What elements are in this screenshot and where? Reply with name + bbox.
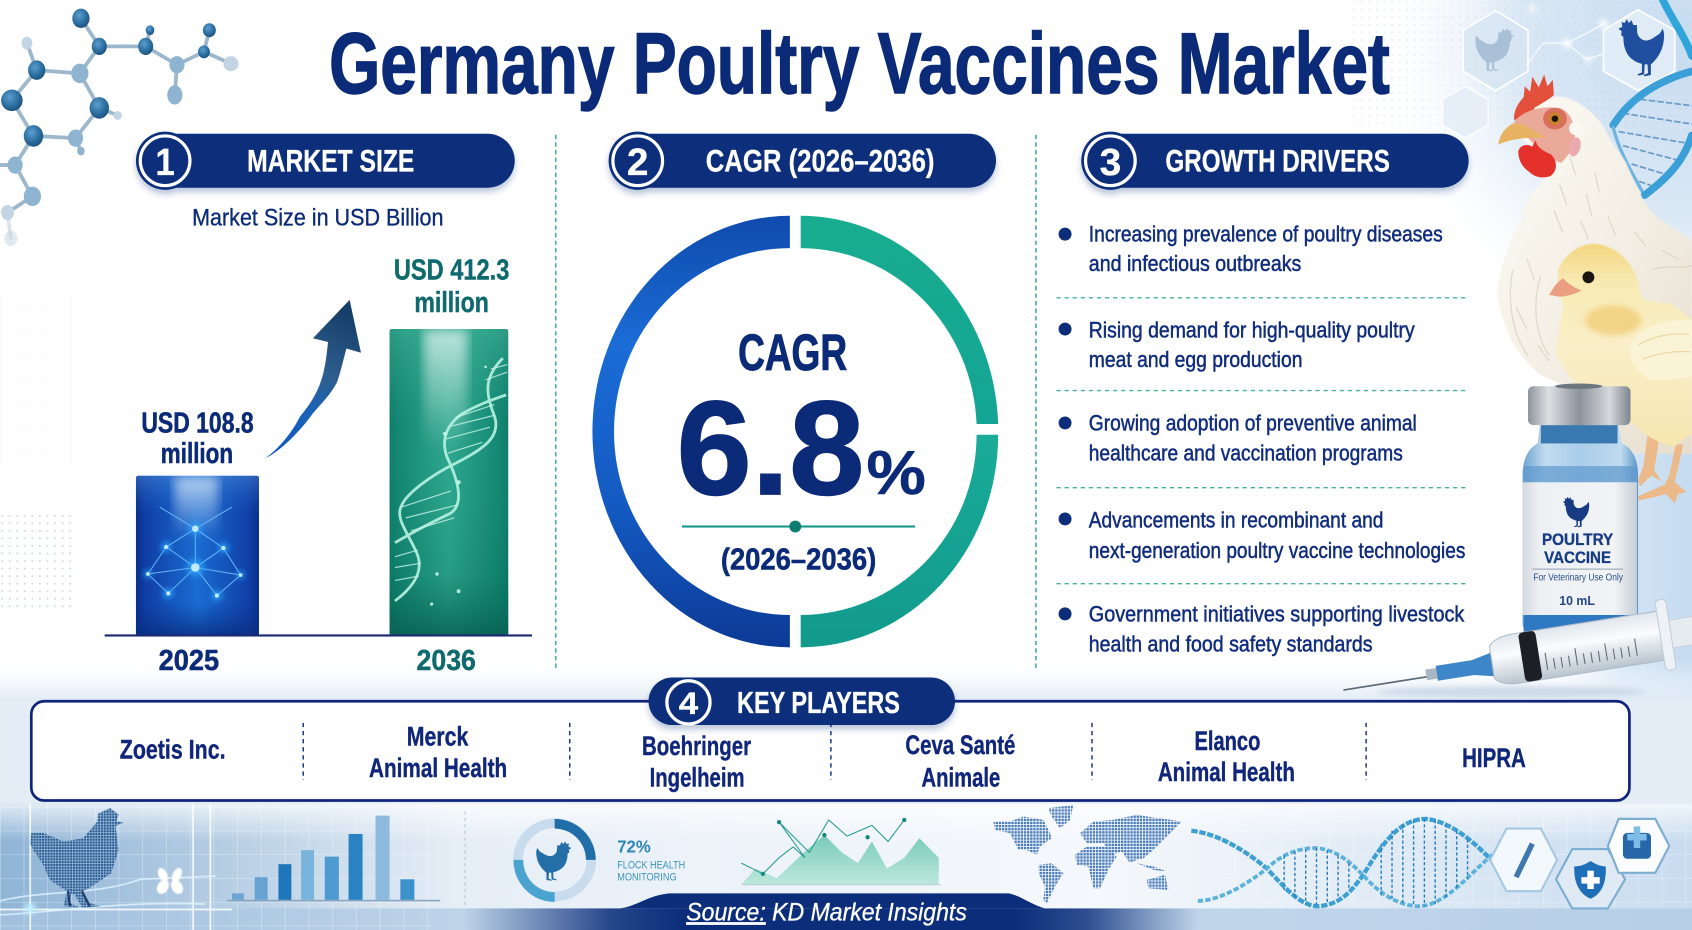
player: Merck: Merck [407,722,469,752]
driver 1: Increasing prevalence of poultry diseases [1089,222,1443,247]
heading: growth drivers [1081,132,1469,190]
hexagon: medical [1608,819,1669,873]
heading: key players [649,678,955,725]
value label 2025: USD 108.8 [141,408,254,440]
driver 2: meat and egg production [1089,347,1302,372]
player: HIPRA: HIPRA [1462,743,1526,773]
value label 2036 [394,254,509,319]
player: Zoetis: Zoetis Inc. [120,734,226,764]
dotted chicken [30,808,123,907]
panel: market size [105,132,532,677]
heading: market size: MARKET SIZE [247,144,414,179]
hen illustration [1497,74,1692,454]
top-right hexagons and dna [1443,0,1692,195]
player: Ceva [905,730,1015,793]
title: Germany Poultry Vaccines Market [329,16,1390,112]
chick body [1556,244,1692,447]
chick legs [1638,434,1687,503]
world map [993,805,1182,903]
chick wing [1629,320,1692,380]
year label 2025: 2025 [159,645,219,677]
chart subtitle: Market Size in USD Billion [192,204,444,231]
player: Boehringer: Boehringer [642,731,751,761]
driver 4: next-generation poultry vaccine technologies [1089,538,1465,563]
heading: cagr: 2 [627,142,649,184]
hen face [1514,107,1575,163]
player: Elanco [1158,726,1295,787]
cagr label: CAGR [738,324,847,381]
line area chart [741,818,941,885]
player: Merck: Animal Health [369,753,507,783]
bar 2025 [136,476,259,635]
heading: cagr: CAGR (2026–2036) [706,144,934,179]
driver 5: Government initiatives supporting livestock [1089,601,1465,626]
flock health text: FLOCK HEALTH [617,860,685,872]
bottom strip [30,805,1669,930]
dna helix [1191,819,1513,906]
vial label: VACCINE [1544,548,1611,567]
vial label: For Veterinary Use Only [1533,572,1624,583]
player: Ceva: Ceva Santé [905,730,1015,760]
baseline axis [105,634,532,637]
vial label: 10 mL [1559,593,1595,608]
flock health donut [514,819,596,902]
vial label: POULTRY [1542,530,1613,549]
flock health text: MONITORING [617,871,677,883]
player: Boehringer: Ingelheim [650,763,745,793]
donut ring [592,216,998,647]
chick beak [1549,278,1582,297]
bar 2036 [390,329,508,635]
heading: growth drivers: 3 [1100,142,1121,184]
driver 3: Growing adoption of preventive animal [1089,410,1417,435]
driver 1 [1059,222,1443,276]
vial label [1532,530,1624,608]
driver 1: and infectious outbreaks [1089,251,1301,276]
syringe [1337,592,1692,721]
heading: cagr [609,132,996,190]
cagr value: % [867,438,926,508]
driver 4: Advancements in recombinant and [1089,508,1383,533]
panel: cagr [592,132,998,647]
source banner: Source: KD Market Insights [686,899,967,926]
flock health text [617,836,685,883]
value label 2036: million [414,287,489,319]
driver 2 [1059,318,1415,372]
panel: growth drivers [1056,132,1469,657]
heading: market size: 1 [155,142,175,184]
driver 5: health and food safety standards [1089,632,1373,657]
value label 2036: USD 412.3 [394,254,509,286]
cagr value: 6.8 [677,374,864,523]
heading: growth drivers: GROWTH DRIVERS [1165,144,1390,179]
key players box [31,701,1629,801]
vial chicken icon [1563,497,1589,527]
player: Elanco: Elanco [1195,726,1260,756]
arrow: growth [265,300,361,459]
divider [555,135,557,669]
value label 2025 [141,408,254,470]
source banner [464,893,1198,930]
molecule decoration [0,9,238,246]
mini bar chart [227,816,440,901]
hen wattle [1518,140,1556,177]
heading: key players: KEY PLAYERS [737,687,900,720]
bar chart [105,254,532,677]
panel: key players [31,678,1629,801]
hen beak [1498,123,1546,145]
hen comb [1514,74,1554,120]
hexagon: shield [1556,849,1625,908]
driver 2: Rising demand for high-quality poultry [1089,318,1415,343]
cagr period: (2026–2036) [721,544,876,577]
driver 3 [1059,410,1417,466]
vaccine vial [1523,384,1638,634]
year label 2036: 2036 [417,645,476,677]
flock health text: 72% [617,836,651,856]
driver 5 [1059,601,1465,657]
white flower glyph [154,866,185,896]
driver 3: healthcare and vaccination programs [1089,441,1403,466]
driver 4 [1059,508,1465,563]
heading: key players: 4 [679,686,699,721]
player: Elanco: Animal Health [1158,757,1295,787]
chick illustration [1549,244,1692,503]
ring divider with dot [682,521,915,532]
value label 2025: million [161,438,233,470]
player: Boehringer [642,731,751,793]
heading: market size [136,132,515,190]
player: Ceva: Animale [922,763,1000,793]
hexagon: syringe [1490,829,1557,891]
player: Merck [369,722,507,783]
